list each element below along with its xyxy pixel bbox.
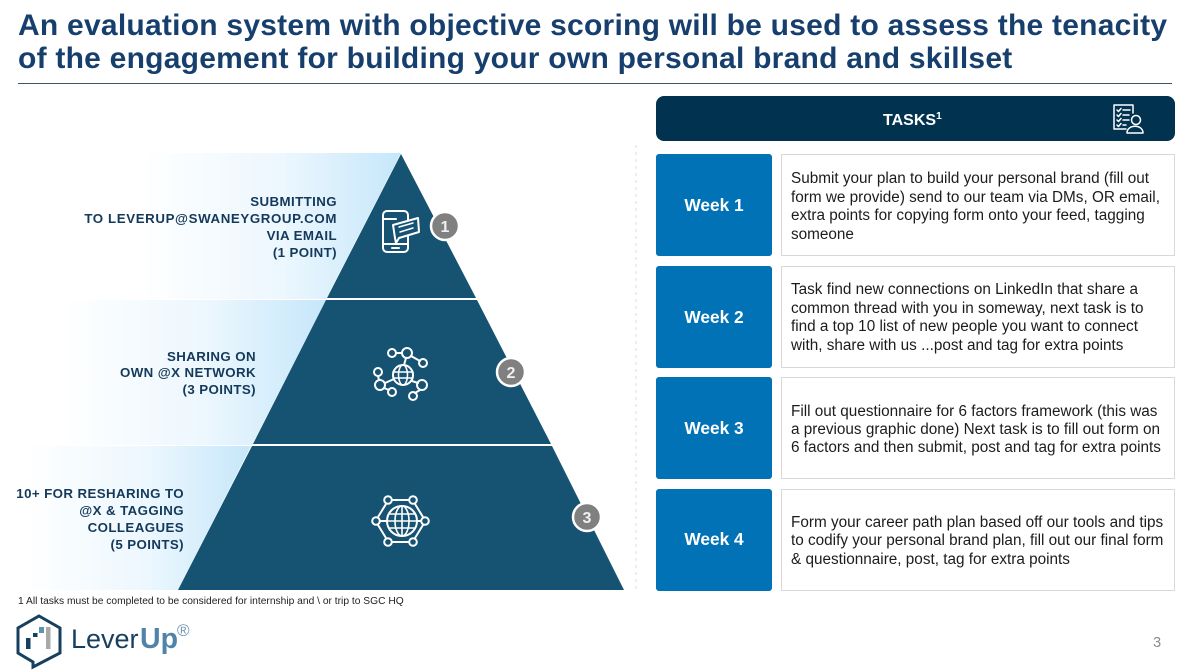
week 3 text: Fill out questionnaire for 6 factors framework (this was: [791, 403, 1158, 420]
gradient band: tier 2: [60, 300, 326, 445]
gradient band: tier 3: [25, 446, 251, 590]
week 3 text: [782, 378, 1174, 478]
week 2 row: [656, 266, 1174, 368]
label: tier 3: 10+ FOR RESHARING TO: [16, 486, 184, 501]
week 3 label: Week 3: [684, 418, 744, 438]
week 1 text: form we provide) send to our team via DMs, OR email,: [791, 189, 1160, 206]
week 1 label: [656, 154, 772, 256]
pyramid tier 1: [327, 154, 476, 298]
label: tier 1: VIA EMAIL: [267, 228, 337, 243]
badge 3: [573, 503, 601, 531]
week 1 row: [656, 154, 1174, 256]
icon: social network globe: [374, 348, 427, 400]
page number: 3: [1153, 635, 1161, 651]
label: tier 2: SHARING ON: [167, 349, 256, 364]
week 4 text: to codify your personal brand plan, fill out our final form: [791, 532, 1163, 549]
title: [18, 9, 1167, 75]
title: An evaluation system with objective scoring will be used to assess the tenacity: [18, 9, 1167, 42]
icon: phone with chat bubble: [383, 211, 419, 252]
week 2 text: with, share with us ...post and tag for extra points: [790, 337, 1124, 354]
label: tier 1: SUBMITTING: [250, 194, 337, 209]
week 1 text: [782, 154, 1174, 256]
label: tier 3: (5 POINTS): [111, 537, 184, 552]
logo: LeverUp: ®: [177, 621, 190, 640]
week 1 text: someone: [791, 226, 854, 243]
week 4 text: Form your career path plan based off our tools and tips: [791, 514, 1164, 531]
title: of the engagement for building your own personal brand and skillset: [18, 42, 1013, 75]
week 1 text: extra points for copying form onto your feed, tagging: [791, 207, 1145, 224]
week 2 text: find a top 10 list of new people you want to connect: [791, 318, 1139, 335]
week 4 text: & questionnaire, post, tag for extra points: [791, 551, 1070, 568]
badge 1: [431, 212, 459, 240]
gradient band: tier 1: [140, 153, 401, 299]
label: tier 1: TO LEVERUP@SWANEYGROUP.COM: [84, 211, 337, 226]
label: tier 3: [16, 486, 184, 552]
week 2 text: Task find new connections on LinkedIn that share a: [791, 281, 1138, 298]
tasks header: TASKS: [883, 112, 936, 129]
week 3 text: 6 factors and then submit, post and tag for extra points: [791, 439, 1161, 456]
label: tier 2: OWN @X NETWORK: [120, 365, 256, 380]
week 1 text: Submit your plan to build your personal brand (fill out: [791, 170, 1150, 187]
label: tier 2: (3 POINTS): [183, 382, 256, 397]
logo: LeverUp: Up: [140, 623, 178, 655]
week 3 row: [656, 377, 1174, 479]
logo: LeverUp: [18, 616, 190, 667]
week 2 label: [656, 266, 772, 368]
icon: connected globe: [372, 496, 429, 546]
week 4 text: [782, 490, 1174, 590]
badge 1: 1: [441, 219, 450, 236]
badge 2: 2: [507, 365, 516, 382]
footnote: 1 All tasks must be completed to be considered for internship and \ or trip to SGC HQ: [18, 596, 404, 607]
tasks header: [656, 96, 1175, 141]
week 4 label: [656, 489, 772, 591]
week 2 text: [782, 266, 1174, 368]
pyramid tier 3: [178, 446, 624, 590]
label: tier 2: [120, 349, 256, 397]
pyramid diagram: [16, 153, 624, 590]
badge 2: [497, 358, 525, 386]
label: tier 3: @X & TAGGING: [79, 503, 184, 518]
week 1 label: Week 1: [684, 195, 744, 215]
tasks header: 1: [936, 110, 942, 122]
label: tier 3: COLLEAGUES: [88, 520, 184, 535]
week 3 text: a previous graphic done) Next task is to fill out form on: [791, 421, 1160, 438]
week 4 label: Week 4: [684, 529, 744, 549]
icon: checklist with person: [1114, 105, 1143, 133]
label: tier 1: (1 POINT): [273, 245, 337, 260]
badge 3: 3: [583, 510, 592, 527]
pyramid tier 2: [253, 300, 551, 444]
label: tier 1: [84, 194, 337, 260]
week 2 label: Week 2: [684, 307, 744, 327]
logo: LeverUp: Lever: [71, 624, 139, 654]
week 4 row: [656, 489, 1174, 591]
week 2 text: common thread with you in someway, next task is to: [791, 300, 1144, 317]
week 3 label: [656, 377, 772, 479]
